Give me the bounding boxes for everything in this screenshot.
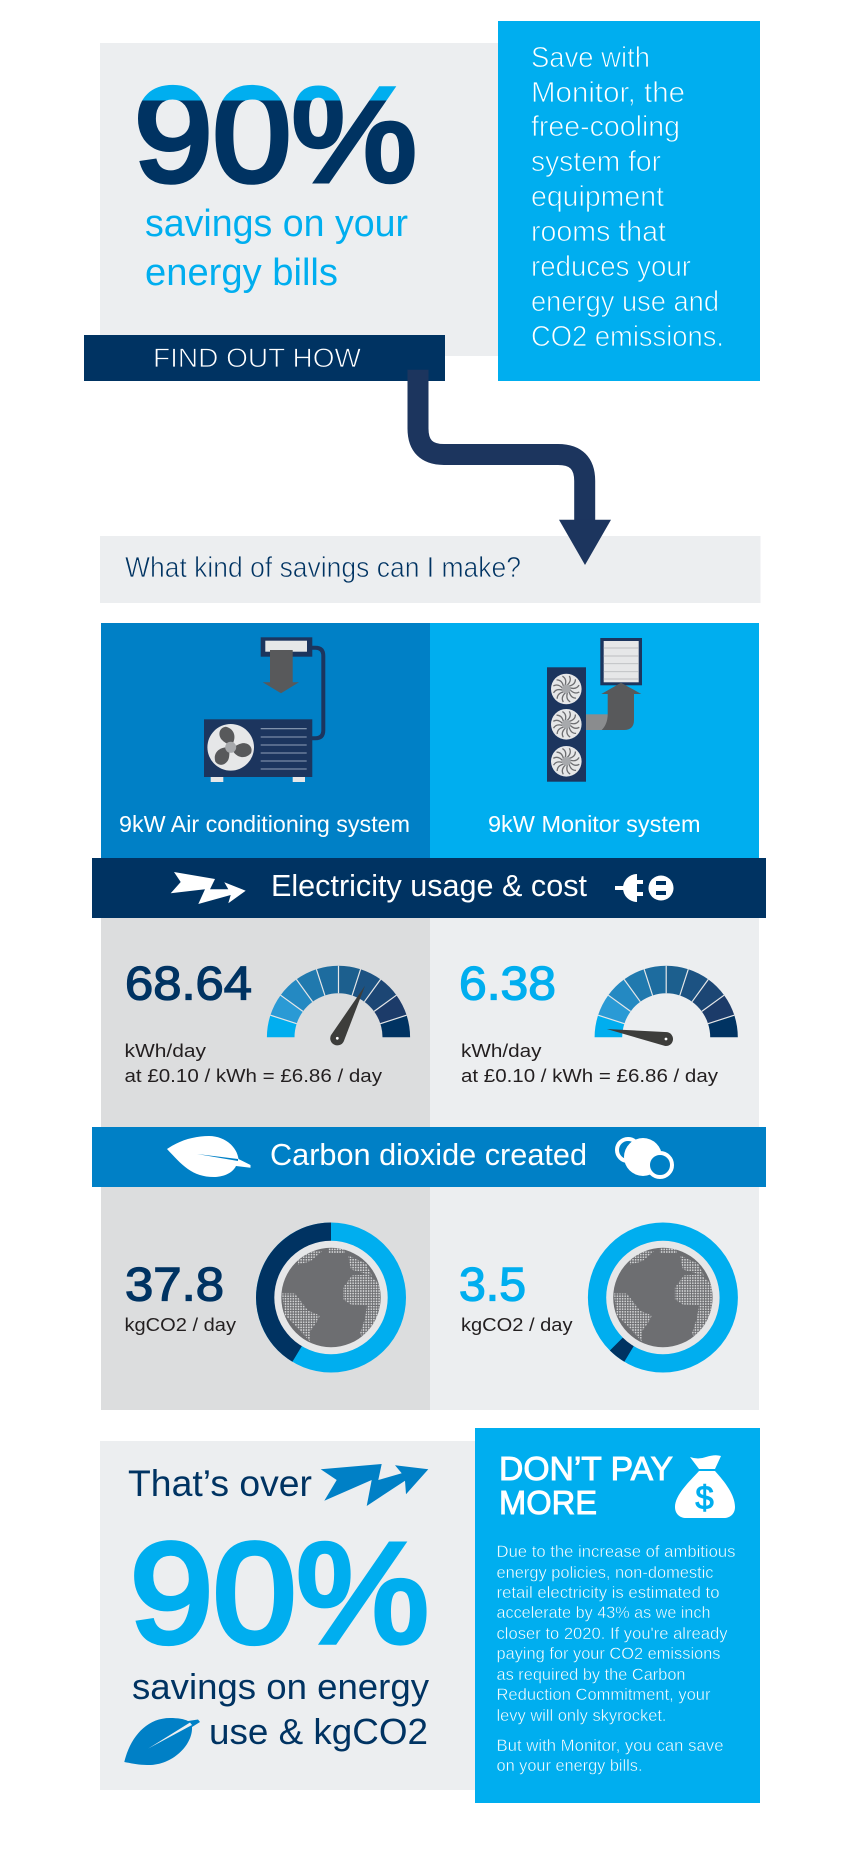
donut chart: globe with small share [597,1232,728,1363]
gauge: high usage [270,966,407,1045]
panel: electricity comparison right [430,918,759,1127]
heading text: electricity usage: Electricity usage & cost [271,868,587,903]
subheading: savings on your energy bills: energy bills [145,252,338,294]
heading text: carbon dioxide: Carbon dioxide created [270,1137,587,1172]
text: usage cost right [461,1040,719,1086]
panel: intro text: free-cooling [531,111,680,143]
stat: 37.8 kgCO2/day [124,1258,237,1335]
panel: summary [100,1441,475,1790]
headline number: 90%: 90% [134,61,417,210]
stat: 68.64 kWh/day: 68.64 [125,956,252,1010]
text block: body copy: levy will only skyrocket. [496,1706,666,1725]
icon: lightning arrows [321,1464,428,1506]
text: that's over: That’s over [128,1463,312,1504]
panel: don't pay more [475,1428,760,1803]
heading: don't pay more: MORE [499,1484,597,1521]
stat: 37.8 kgCO2/day: 37.8 [125,1258,224,1310]
button: find out how [84,335,445,381]
text block: body copy: closer to 2020. If you're already [496,1624,728,1643]
text: usage cost left: at £0.10 / kWh = £6.86 / day [124,1065,383,1086]
panel: intro text: energy use and [531,286,719,318]
text block: body copy: as required by the Carbon [496,1665,686,1684]
panel: carbon comparison left [101,1187,430,1410]
label: 9kW air conditioning system: 9kW Air conditioning system [119,811,410,837]
text block: body copy: But with Monitor, you can save [496,1736,724,1755]
text block: body copy: energy policies, non-domestic [496,1563,714,1582]
panel: intro text: rooms that [531,216,666,248]
text block: body copy [496,1542,736,1775]
donut chart: globe with large share [266,1232,396,1363]
icon: leaf [124,1718,200,1765]
text: usage cost right: at £0.10 / kWh = £6.86 / day [461,1065,719,1086]
label: 9kW monitor system: 9kW Monitor system [488,811,700,837]
panel: intro text [498,21,760,381]
stat: 3.5 kgCO2/day: kgCO2 / day [461,1314,573,1335]
panel: intro text: system for [531,146,661,178]
panel: carbon comparison right [430,1187,759,1410]
subheading: savings on your energy bills: savings on your [145,203,408,245]
icon: plug and socket [615,874,674,902]
text block: body copy: Due to the increase of ambitious [496,1542,736,1561]
panel: intro text: reduces your [531,251,691,283]
text: savings on energy use and kgCO2: savings on energy [132,1666,429,1707]
stat: 3.5 kgCO2/day: 3.5 [459,1258,526,1310]
icon: co2 bubbles [617,1138,672,1177]
text block: body copy: retail electricity is estimated to [496,1583,720,1602]
stat: 37.8 kgCO2/day: kgCO2 / day [124,1314,237,1335]
panel: air conditioning system [101,623,430,858]
stat: 6.38 kWh/day: 6.38 [459,956,556,1010]
stat: 90%: 90% [130,1514,429,1673]
panel: intro text: Save with [531,42,650,74]
stat: 3.5 kgCO2/day [459,1258,573,1335]
icon: money bag [675,1455,735,1518]
heading bar: electricity usage and cost [92,858,766,918]
icon: money bag: $ [695,1479,714,1516]
panel: question heading: What kind of savings can I make? [125,552,521,584]
text block: body copy: Reduction Commitment, your [496,1685,711,1704]
text: usage cost right: kWh/day [461,1040,542,1061]
button: find out how: FIND OUT HOW [153,343,362,373]
heading bar: carbon dioxide created [92,1127,766,1187]
panel: intro text: equipment [531,181,664,213]
text block: body copy: on your energy bills. [496,1756,642,1775]
text block: body copy: paying for your CO2 emissions [496,1644,720,1663]
panel: intro text: Monitor, the [531,77,685,109]
panel: monitor system [430,623,759,858]
panel: headline saving [100,43,498,356]
arrow: from button to question [418,370,611,565]
text block: body copy: accelerate by 43% as we inch [496,1603,710,1622]
heading: don't pay more [499,1450,673,1521]
text: usage cost left [124,1040,383,1086]
icon: air conditioner [204,637,323,782]
icon: lightning arrows [171,872,246,904]
panel: intro text: CO2 emissions. [531,321,724,353]
gauge: low usage [598,966,734,1046]
panel: question heading [100,536,760,603]
subheading: savings on your energy bills [145,203,408,294]
panel: electricity comparison left [101,918,430,1127]
text: usage cost left: kWh/day [124,1040,207,1061]
heading: don't pay more: DON’T PAY [499,1450,673,1487]
text: savings on energy use and kgCO2 [132,1666,429,1752]
icon: leaf [167,1136,250,1177]
text: savings on energy use and kgCO2: use & kgCO2 [209,1711,428,1752]
icon: monitor unit [547,638,642,782]
